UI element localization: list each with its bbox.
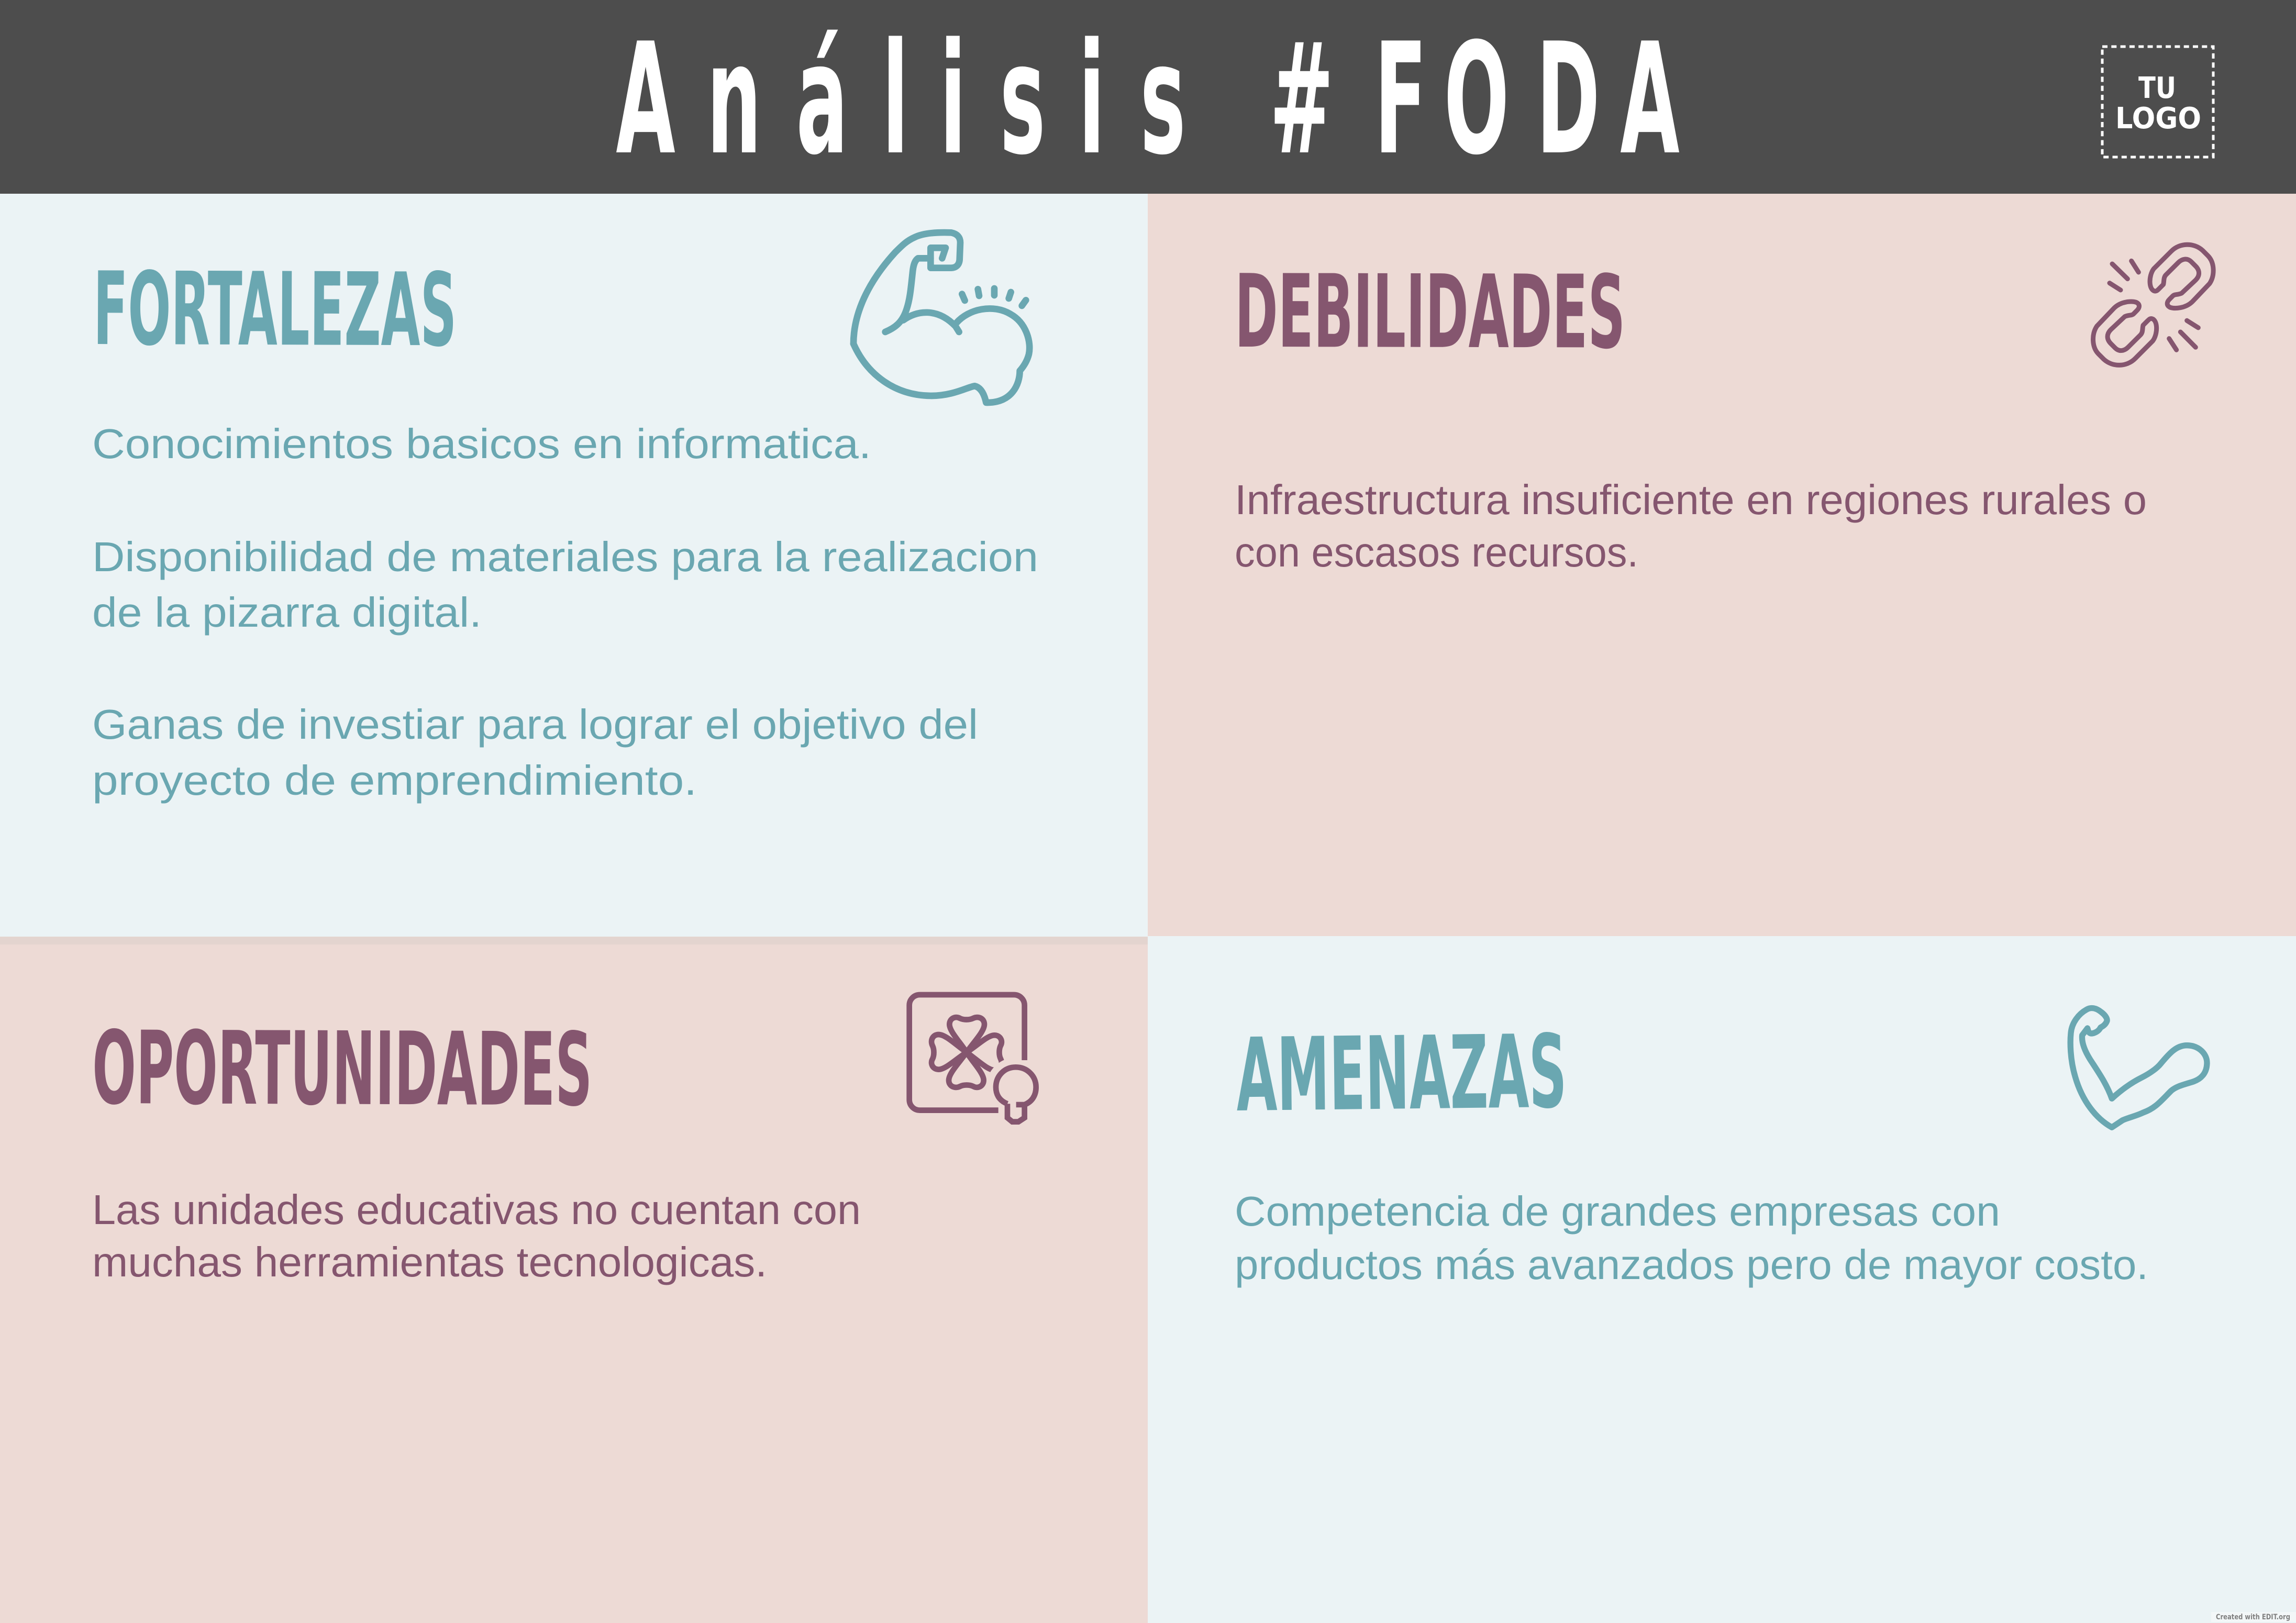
text: fortalezas list: proyecto de emprendimiento. xyxy=(92,757,697,804)
text: oportunidades: Las unidades educativas no cuentan con xyxy=(92,1186,861,1233)
heading: debilidades: DEBILIDADES xyxy=(1235,253,1625,372)
icon: flexed bicep xyxy=(853,232,1029,403)
logo placeholder xyxy=(2102,47,2213,157)
panel: oportunidades xyxy=(0,937,1148,1623)
logo placeholder: LOGO xyxy=(2115,102,2201,136)
heading: fortalezas: FORTALEZAS xyxy=(93,250,457,369)
text: oportunidades xyxy=(92,1186,861,1285)
text: debilidades: Infraestructura insuficiente en regiones rurales o xyxy=(1235,476,2147,523)
panel: amenazas xyxy=(1148,936,2296,1623)
panel: fortalezas xyxy=(0,194,1148,937)
text: oportunidades: muchas herramientas tecnologicas. xyxy=(92,1239,767,1285)
panel: debilidades xyxy=(1148,194,2296,936)
text: amenazas xyxy=(1235,1188,2148,1288)
text: fortalezas list: Disponibilidad de materiales para la realizacion xyxy=(92,533,1038,580)
heading: oportunidades: OPORTUNIDADES xyxy=(92,1009,593,1129)
heading: amenazas: AMENAZAS xyxy=(1236,1013,1567,1135)
text: fortalezas list: Conocimientos basicos en informatica. xyxy=(92,420,871,467)
icon: clover with light bulb xyxy=(909,995,1046,1122)
text: debilidades xyxy=(1235,476,2147,575)
text: fortalezas list xyxy=(92,420,1038,804)
icon: broken chain xyxy=(2093,244,2213,365)
text: debilidades: con escasos recursos. xyxy=(1235,529,1638,575)
text: amenazas: Competencia de grandes empresas con xyxy=(1235,1188,2000,1235)
title: Análisis #FODA xyxy=(616,10,1680,189)
text: fortalezas list: de la pizarra digital. xyxy=(92,589,482,636)
panel: header bar xyxy=(0,0,2296,194)
text: fortalezas list: Ganas de investiar para lograr el objetivo del xyxy=(92,701,978,748)
logo placeholder: TU xyxy=(2138,71,2176,105)
icon: arm xyxy=(2070,1008,2207,1127)
text: amenazas: productos más avanzados pero de mayor costo. xyxy=(1235,1241,2148,1288)
